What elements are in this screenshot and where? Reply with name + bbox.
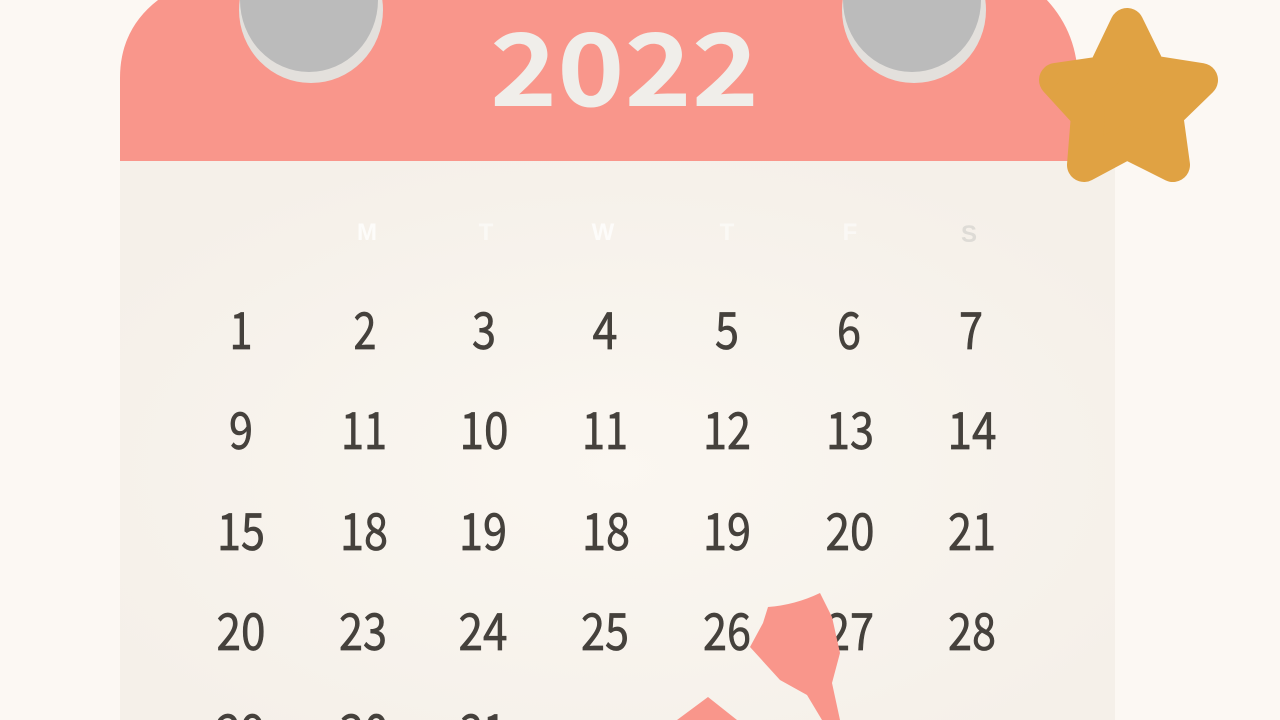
row 4: 26 [703, 591, 751, 665]
row 4: 20 [216, 591, 266, 665]
row 3: 19 [703, 491, 751, 565]
row 1: 7 [959, 290, 983, 364]
row 3: 21 [948, 491, 996, 565]
row 4: 28 [948, 591, 996, 665]
row 4: 23 [339, 591, 387, 665]
row 2: 12 [703, 390, 751, 464]
panel: calendar body [120, 161, 1115, 720]
date grid [216, 290, 996, 720]
row 3 [217, 491, 996, 565]
weekday labels: S [961, 221, 977, 248]
panel: calendar header [120, 0, 1078, 161]
row 4: 25 [581, 591, 629, 665]
row 1: 2 [354, 290, 376, 364]
row 4: 24 [458, 591, 508, 665]
row 4 [216, 591, 996, 665]
weekday labels: T [720, 219, 735, 246]
row 3: 19 [459, 491, 507, 565]
row 4: 27 [826, 591, 874, 665]
icon: pink torn shape lower [677, 697, 737, 720]
row 1: 5 [715, 290, 739, 364]
icon: pink torn shape upper [750, 593, 840, 720]
weekday labels: F [843, 219, 857, 246]
row 2: 11 [341, 390, 387, 464]
weekday labels [357, 219, 977, 248]
row 3: 18 [340, 491, 388, 565]
row 3: 20 [826, 491, 874, 565]
row 3: 15 [217, 491, 265, 565]
icon: left binder hole [239, 0, 383, 83]
row 2: 11 [582, 390, 628, 464]
row 1: 3 [472, 290, 496, 364]
icon: right binder hole [842, 0, 986, 83]
row 1: 1 [230, 290, 252, 364]
row 2: 13 [826, 390, 874, 464]
row 1: 6 [837, 290, 861, 364]
row 2: 14 [948, 390, 996, 464]
weekday labels: M [357, 219, 377, 246]
row 3: 18 [582, 491, 630, 565]
row 1 [230, 290, 983, 364]
icon: star [1056, 25, 1201, 165]
row 2 [229, 390, 996, 464]
row 1: 4 [592, 290, 618, 364]
weekday labels: W [592, 219, 615, 246]
weekday labels: T [479, 219, 494, 246]
row 5 [216, 692, 506, 720]
row 2: 9 [229, 390, 253, 464]
row 2: 10 [460, 390, 508, 464]
